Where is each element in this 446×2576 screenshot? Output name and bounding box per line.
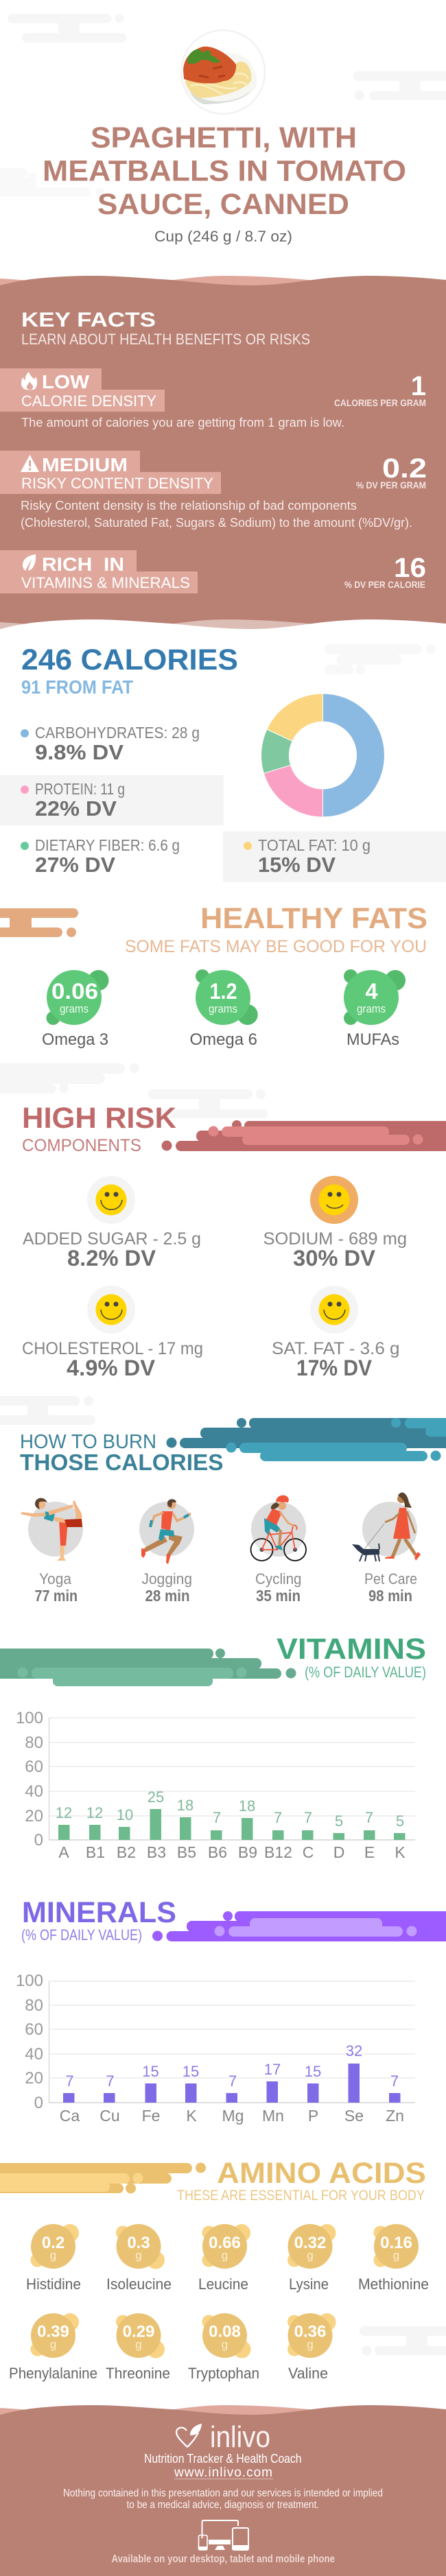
bar chart: vitamins: 7: [213, 1809, 221, 1826]
disclaimer: [63, 2488, 383, 2511]
heading: high risk: HIGH RISK: [22, 1102, 176, 1135]
bar chart: minerals: Se: [344, 2107, 364, 2125]
risk: added sugar: ADDED SUGAR - 2.5 g: [23, 1229, 201, 1249]
heading: key facts: LEARN ABOUT HEALTH BENEFITS OR RISKS: [21, 331, 310, 348]
title: SPAGHETTI, WITH: [91, 121, 357, 154]
title: [43, 121, 406, 221]
title: SAUCE, CANNED: [97, 188, 349, 221]
bar chart: vitamins: 5: [396, 1812, 404, 1830]
legend: protein: PROTEIN: 11 g: [35, 780, 125, 798]
fat: omega 6: 1.2: [210, 979, 237, 1004]
bar chart: vitamins: D: [333, 1843, 344, 1861]
fat: omega 6: Omega 6: [189, 1030, 257, 1049]
activity: yoga: Yoga: [39, 1570, 72, 1587]
activity: cycling: 35 min: [256, 1587, 301, 1605]
bar chart: minerals: 0: [34, 2094, 43, 2112]
panel: calories: [0, 643, 446, 882]
heading: healthy fats: HEALTHY FATS: [200, 902, 427, 935]
bar chart: minerals: Ca: [60, 2107, 80, 2125]
heading: amino acids: AMINO ACIDS: [217, 2157, 426, 2190]
amino: lysine: Lysine: [289, 2276, 329, 2293]
legend: protein: 22% DV: [35, 796, 117, 820]
heading: minerals: [21, 1896, 176, 1943]
risk: cholesterol: CHOLESTEROL - 17 mg: [22, 1339, 203, 1358]
heading: vitamins: VITAMINS: [277, 1633, 426, 1666]
icon: cyclist figure: [251, 1496, 306, 1561]
amino: histidine: Histidine: [26, 2276, 81, 2293]
fat: omega 3: grams: [60, 1002, 89, 1015]
risk: cholesterol: 4.9% DV: [67, 1356, 156, 1380]
fact: rich in vitamins and minerals: [0, 550, 426, 593]
bar chart: minerals: 7: [106, 2072, 115, 2090]
risk: saturated fat: 17% DV: [296, 1356, 373, 1380]
heading: key facts: [21, 309, 310, 348]
bar chart: vitamins: 60: [25, 1758, 43, 1776]
fat: omega 3: 0.06: [51, 979, 98, 1004]
icon: jogger figure: [141, 1499, 191, 1564]
amino: methionine: Methionine: [358, 2276, 429, 2293]
heading: how to burn: [20, 1431, 224, 1475]
icon: warning triangle: [21, 455, 39, 472]
heading: how to burn: THOSE CALORIES: [20, 1450, 224, 1475]
bar chart: minerals: Cu: [99, 2107, 120, 2125]
bar chart: minerals: K: [186, 2107, 197, 2125]
bar chart: minerals: 7: [228, 2072, 237, 2090]
fact: medium risky content density: % DV PER GRAM: [356, 480, 426, 491]
amino: methionine: g: [393, 2249, 399, 2262]
fact: rich in vitamins and minerals: 16: [394, 553, 426, 583]
fat: omega 6: grams: [209, 1002, 237, 1015]
legend: dietary fiber: DIETARY FIBER: 6.6 g: [35, 836, 180, 854]
fact: low calorie density: LOW: [42, 371, 90, 392]
bar chart: minerals: Fe: [142, 2107, 160, 2125]
activity: pet care: Pet Care: [364, 1570, 417, 1587]
amino: threonine: Threonine: [106, 2365, 170, 2382]
decorative bars: burn: [166, 1418, 446, 1461]
fat: MUFAs: 4: [365, 979, 378, 1004]
bar chart: minerals: Mn: [262, 2107, 284, 2125]
amino: methionine: [358, 2224, 429, 2293]
amino: leucine: g: [222, 2249, 228, 2262]
fact: low calorie density: The amount of calories you are getting from 1 gram is low.: [21, 416, 344, 429]
amino: valine: [287, 2313, 336, 2382]
panel: high risk components: [0, 1063, 446, 1380]
icon: yoga figure: [21, 1498, 82, 1561]
icon: leaf: [23, 554, 36, 571]
risk: saturated fat: [272, 1286, 399, 1380]
fat: omega 6: [189, 969, 258, 1049]
icon: smiley: [96, 1294, 126, 1325]
logo: inlivo heart: [176, 2424, 202, 2447]
heading: high risk: [22, 1102, 176, 1155]
amino: phenylalanine: [9, 2313, 97, 2382]
activity: cycling: Cycling: [255, 1570, 302, 1587]
bar chart: minerals: 100: [16, 1972, 43, 1990]
activity: pet care: 98 min: [368, 1587, 412, 1605]
bar chart: vitamins: 40: [25, 1782, 43, 1801]
bar chart: vitamins: B9: [238, 1843, 257, 1861]
panel: amino acids: [0, 2157, 446, 2382]
amino: phenylalanine: Phenylalanine: [9, 2365, 97, 2382]
amino: tryptophan: Tryptophan: [188, 2365, 259, 2382]
fact: low calorie density: 1: [411, 371, 426, 401]
icon: smiley: [318, 1294, 350, 1325]
risk: sodium: SODIUM - 689 mg: [263, 1229, 407, 1249]
amino: tryptophan: 0.08: [209, 2323, 241, 2341]
bar chart: minerals: 15: [142, 2063, 159, 2080]
fact: rich in vitamins and minerals: VITAMINS & MINERALS: [21, 574, 190, 591]
bar chart: vitamins: 12: [56, 1804, 72, 1821]
bar chart: vitamins: 20: [25, 1807, 43, 1825]
icon: smiley: [318, 1184, 350, 1216]
legend: carbohydrates: [21, 724, 200, 764]
bar chart: minerals: P: [308, 2107, 318, 2125]
website link: www.inlivo.com: [174, 2466, 272, 2480]
heading: amino acids: [177, 2157, 426, 2203]
amino: valine: g: [307, 2338, 314, 2351]
amino: lysine: 0.32: [294, 2234, 326, 2252]
amino: methionine: 0.16: [380, 2234, 412, 2252]
fact: low calorie density: CALORIES PER GRAM: [334, 397, 426, 408]
decorative bars: healthy fats: [0, 908, 78, 937]
serving size: Cup (246 g / 8.7 oz): [154, 228, 292, 245]
bar chart: vitamins: 7: [365, 1809, 373, 1826]
heading: how to burn: HOW TO BURN: [20, 1431, 156, 1453]
title: MEATBALLS IN TOMATO: [43, 155, 406, 188]
bar chart: minerals: 7: [65, 2072, 74, 2090]
amino: histidine: [26, 2224, 81, 2293]
amino: phenylalanine: 0.39: [37, 2323, 69, 2341]
activity: jogging: 28 min: [145, 1587, 189, 1605]
bar chart: minerals: Mg: [222, 2107, 244, 2125]
heading: minerals: (% OF DAILY VALUE): [21, 1926, 142, 1943]
fact: low calorie density: [0, 368, 426, 429]
fact: medium risky content density: (Cholesterol, Saturated Fat, Sugars & Sodium) to the amount (%DV/gr).: [21, 516, 412, 530]
logo wordmark: inlivo: [210, 2420, 270, 2454]
bar chart: vitamins: 12: [86, 1804, 103, 1821]
activity: jogging: [139, 1499, 194, 1605]
bar chart: minerals: 32: [346, 2042, 362, 2059]
amino: leucine: Leucine: [198, 2276, 248, 2293]
legend: total fat: 15% DV: [258, 853, 336, 877]
bar chart: vitamins: C: [303, 1843, 314, 1861]
legend: carbohydrates: 9.8% DV: [35, 740, 124, 764]
activity: pet care: [352, 1492, 421, 1605]
bar chart: vitamins: 18: [177, 1797, 193, 1814]
amino: valine: 0.36: [294, 2323, 326, 2341]
icon: smiley: [96, 1184, 126, 1216]
amino: tryptophan: [188, 2313, 259, 2382]
heading: minerals: MINERALS: [22, 1896, 176, 1929]
bar chart: vitamins: 7: [304, 1809, 312, 1826]
icon: devices: [198, 2520, 248, 2550]
fat: omega 3: [42, 970, 108, 1049]
donut chart: [261, 694, 384, 817]
bar chart: minerals: [16, 1972, 415, 2125]
fact: medium risky content density: MEDIUM: [42, 454, 128, 475]
amino: isoleucine: [106, 2224, 172, 2293]
bar chart: vitamins: K: [395, 1843, 406, 1861]
fat: MUFAs: grams: [357, 1002, 386, 1015]
bar chart: vitamins: 25: [148, 1788, 164, 1806]
heading: high risk: COMPONENTS: [22, 1136, 141, 1155]
bar chart: vitamins: [16, 1709, 415, 1861]
amino: threonine: 0.29: [123, 2323, 154, 2341]
legend: dietary fiber: [21, 836, 180, 877]
activity: jogging: Jogging: [141, 1570, 192, 1587]
activity: cycling: [251, 1496, 306, 1605]
bar chart: minerals: 40: [25, 2045, 43, 2064]
risk: added sugar: 8.2% DV: [67, 1246, 156, 1271]
fat: MUFAs: MUFAs: [347, 1030, 399, 1049]
bar chart: vitamins: 100: [16, 1709, 43, 1727]
legend: total fat: TOTAL FAT: 10 g: [258, 836, 371, 854]
risk: sodium: 30% DV: [293, 1246, 376, 1271]
tagline: Nutrition Tracker & Health Coach: [144, 2452, 302, 2466]
bar chart: vitamins: 80: [25, 1734, 43, 1752]
bar chart: vitamins: E: [364, 1843, 375, 1861]
disclaimer: Nothing contained in this presentation and our services is intended or implied: [63, 2488, 383, 2499]
bar chart: vitamins: 5: [335, 1812, 343, 1830]
bar chart: minerals: 20: [25, 2069, 43, 2088]
amino: threonine: [106, 2313, 170, 2382]
amino: lysine: [287, 2224, 336, 2293]
header panel: [0, 14, 446, 245]
disclaimer: to be a medical advice, diagnosis or treatment.: [126, 2499, 319, 2511]
heading: calories: 246 CALORIES: [21, 643, 238, 676]
panel: how to burn calories: [0, 1396, 446, 1605]
bar chart: vitamins: A: [58, 1843, 69, 1861]
bar chart: minerals: 60: [25, 2020, 43, 2039]
decorative bars: minerals: [152, 1911, 446, 1941]
bar chart: vitamins: 7: [274, 1809, 282, 1826]
risk: added sugar: [23, 1176, 201, 1271]
bar chart: minerals: 15: [183, 2063, 199, 2080]
bar chart: minerals: 15: [305, 2063, 321, 2080]
bar chart: vitamins: B12: [264, 1843, 292, 1861]
bar chart: minerals: Zn: [386, 2107, 404, 2125]
heading: key facts: KEY FACTS: [21, 309, 156, 331]
panel: vitamins: [0, 1633, 426, 1861]
heading: healthy fats: [125, 902, 427, 956]
legend: total fat: [223, 831, 446, 882]
amino: isoleucine: g: [135, 2249, 142, 2262]
risk: saturated fat: SAT. FAT - 3.6 g: [272, 1339, 399, 1358]
amino: valine: Valine: [288, 2365, 328, 2382]
fat: omega 3: Omega 3: [42, 1030, 108, 1049]
amino: threonine: g: [135, 2338, 142, 2351]
legend: dietary fiber: 27% DV: [35, 853, 115, 877]
decorative bars: amino acids: [0, 2162, 206, 2194]
decorative bars: high risk: [162, 1120, 446, 1151]
panel: minerals: [16, 1896, 446, 2125]
amino: isoleucine: 0.3: [127, 2234, 150, 2252]
bar chart: vitamins: B2: [117, 1843, 136, 1861]
amino: histidine: g: [50, 2249, 56, 2262]
amino: isoleucine: Isoleucine: [106, 2276, 172, 2293]
panel: key facts: [0, 276, 446, 646]
heading: calories: [21, 643, 238, 698]
amino: leucine: 0.66: [209, 2234, 241, 2252]
food image: spaghetti plate: [181, 30, 265, 114]
bar chart: vitamins: B1: [86, 1843, 105, 1861]
bar chart: minerals: 7: [390, 2072, 399, 2090]
amino: histidine: 0.2: [42, 2234, 64, 2252]
fact: medium risky content density: RISKY CONTENT DENSITY: [21, 475, 213, 492]
fact: rich in vitamins and minerals: % DV PER CALORIE: [344, 579, 425, 590]
fact: medium risky content density: [0, 451, 427, 530]
panel: healthy fats: [0, 902, 427, 1049]
amino: lysine: g: [307, 2249, 314, 2262]
fact: rich in vitamins and minerals: RICH IN: [42, 554, 124, 575]
panel: footer: [0, 2405, 446, 2576]
availability note: Available on your desktop, tablet and mobile phone: [111, 2553, 335, 2565]
risk: sodium: [263, 1176, 407, 1271]
icon: flame: [21, 372, 37, 390]
legend: carbohydrates: CARBOHYDRATES: 28 g: [35, 724, 200, 742]
bar chart: vitamins: 10: [117, 1806, 133, 1823]
bar chart: vitamins: B5: [177, 1843, 196, 1861]
bar chart: vitamins: B6: [208, 1843, 227, 1861]
bar chart: minerals: 80: [25, 1996, 43, 2015]
bar chart: vitamins: 0: [34, 1831, 43, 1850]
activity: yoga: 77 min: [34, 1587, 78, 1605]
risk: cholesterol: [22, 1286, 203, 1380]
activity: yoga: [21, 1498, 83, 1605]
legend: protein: [0, 775, 224, 825]
bar chart: minerals: 17: [264, 2061, 281, 2078]
amino: phenylalanine: g: [50, 2338, 56, 2351]
bar chart: vitamins: B3: [147, 1843, 166, 1861]
bar chart: vitamins: 18: [239, 1797, 255, 1815]
icon: woman walking dog: [352, 1492, 421, 1561]
heading: vitamins: [277, 1633, 426, 1681]
fat: MUFAs: [344, 969, 406, 1049]
fact: medium risky content density: Risky Content density is the relationship of bad components: [21, 499, 357, 512]
amino: leucine: [198, 2224, 250, 2293]
heading: calories: 91 FROM FAT: [21, 676, 133, 698]
fact: low calorie density: CALORIE DENSITY: [21, 392, 156, 410]
fact: medium risky content density: 0.2: [382, 453, 427, 484]
decorative bars: vitamins: [0, 1649, 296, 1686]
amino: tryptophan: g: [222, 2338, 228, 2351]
heading: healthy fats: SOME FATS MAY BE GOOD FOR YOU: [125, 937, 427, 956]
